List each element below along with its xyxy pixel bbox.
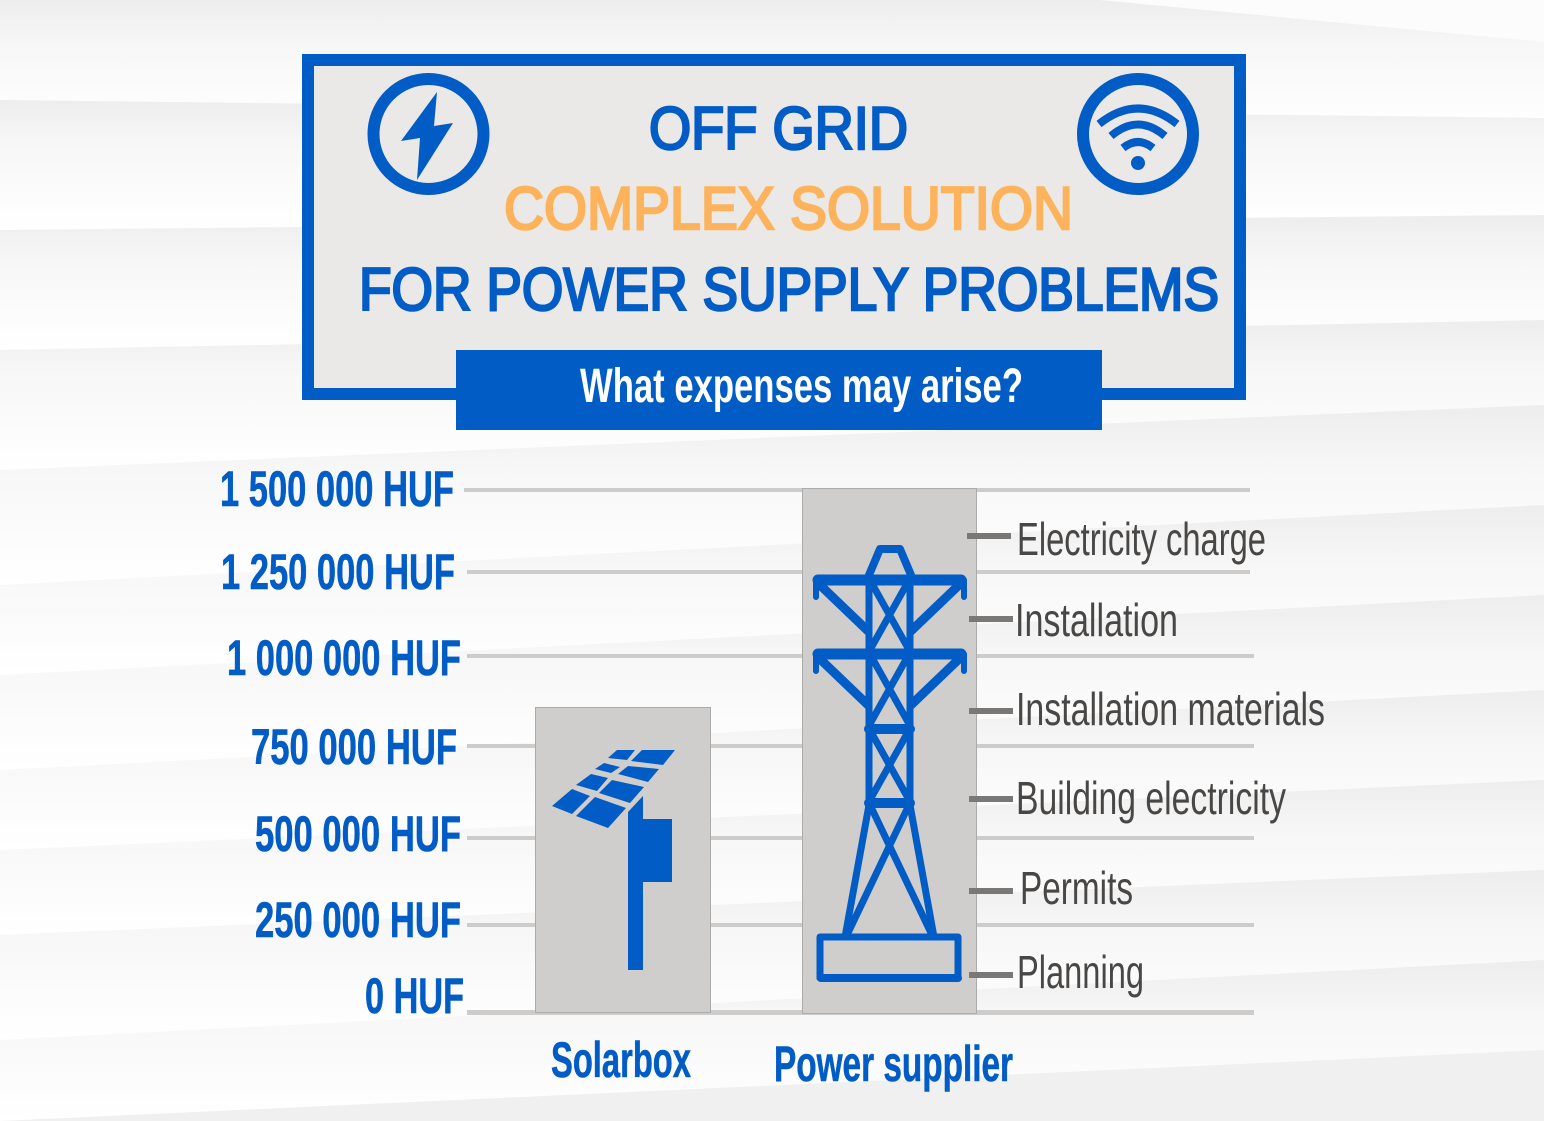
bar: Power supplier xyxy=(802,488,976,1014)
bar labels: Power supplier xyxy=(774,1036,1013,1092)
legend: cost items: Building electricity xyxy=(1016,772,1286,824)
y axis labels: 1 500 000 HUF xyxy=(220,461,454,517)
legend: cost items: Installation materials xyxy=(1016,683,1325,735)
y axis labels: 250 000 HUF xyxy=(255,892,461,948)
icon: pylon xyxy=(816,549,964,978)
y axis labels xyxy=(220,461,464,1024)
bar: Solarbox xyxy=(536,708,710,1012)
icon: solar panel xyxy=(552,750,675,970)
bar labels: Solarbox xyxy=(551,1032,691,1088)
bar labels xyxy=(551,1032,1013,1092)
cost chart xyxy=(220,461,1325,1092)
y axis labels: 1 250 000 HUF xyxy=(221,544,455,600)
legend: cost items: Planning xyxy=(1017,946,1144,998)
y axis labels: 750 000 HUF xyxy=(251,719,457,775)
grid lines xyxy=(464,488,1254,1015)
icon: wifi signal xyxy=(1083,79,1193,189)
icon: lightning bolt xyxy=(374,79,484,189)
y axis labels: 0 HUF xyxy=(365,968,464,1024)
subtitle banner xyxy=(456,350,1102,430)
legend: cost items xyxy=(967,513,1325,998)
title line 2: COMPLEX SOLUTION xyxy=(504,175,1073,242)
title panel xyxy=(308,60,1240,430)
y axis labels: 1 000 000 HUF xyxy=(227,630,461,686)
legend: cost items: Permits xyxy=(1020,862,1133,914)
subtitle banner: What expenses may arise? xyxy=(580,360,1023,413)
legend: cost items: Installation xyxy=(1015,594,1178,646)
y axis labels: 500 000 HUF xyxy=(255,806,461,862)
title line 3: FOR POWER SUPPLY PROBLEMS xyxy=(359,256,1219,323)
legend: cost items: Electricity charge xyxy=(1017,513,1266,565)
title line 1: OFF GRID xyxy=(649,95,908,162)
